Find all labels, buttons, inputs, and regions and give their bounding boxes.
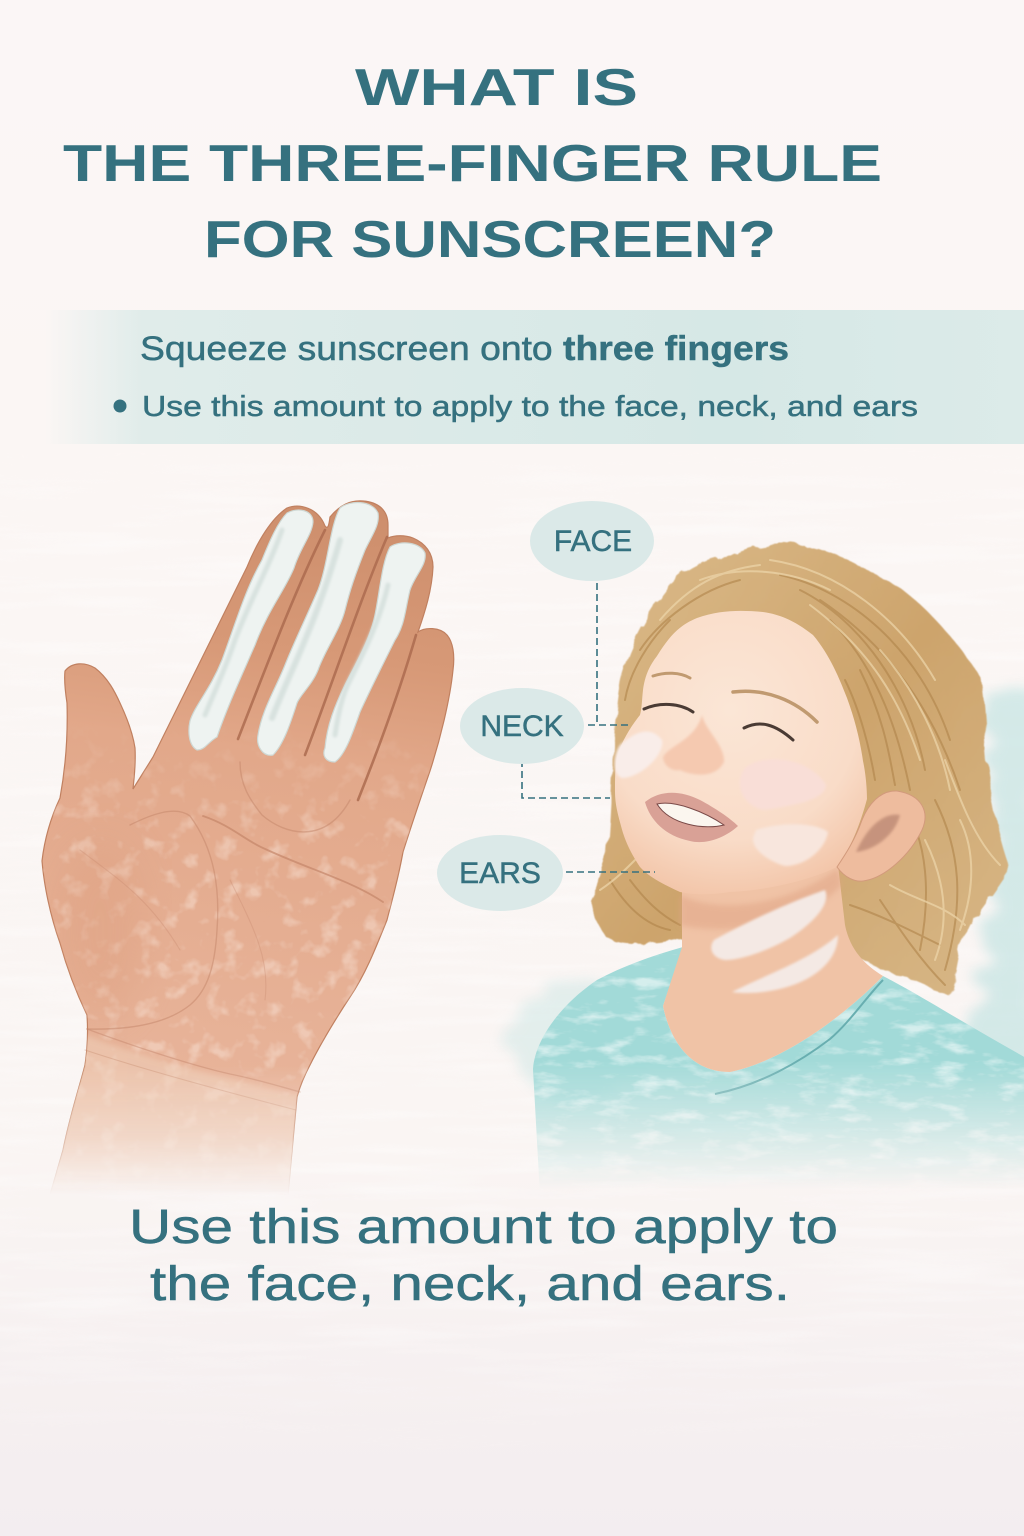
closing statement: the face, neck, and ears. bbox=[150, 1258, 790, 1311]
background paper streaks bbox=[0, 445, 1024, 1460]
sunscreen: left cheek bbox=[615, 732, 662, 778]
illustration: hand with sunscreen bbox=[40, 501, 460, 1200]
neck bbox=[663, 865, 883, 1072]
closing statement: Use this amount to apply to bbox=[129, 1201, 838, 1254]
sunscreen strip: ring finger bbox=[324, 543, 425, 762]
illustration: teal watercolor wash bbox=[510, 690, 1024, 1100]
lips bbox=[645, 793, 738, 842]
eyebrows bbox=[653, 673, 817, 722]
ear bbox=[837, 791, 925, 881]
sunscreen strip: middle finger bbox=[258, 503, 378, 755]
skin mottling bbox=[43, 760, 424, 1179]
connector lines bbox=[522, 572, 655, 872]
closing statement bbox=[129, 1201, 838, 1311]
face bbox=[615, 611, 867, 894]
label: EARS bbox=[437, 835, 563, 911]
hand shape bbox=[42, 501, 454, 1195]
finger gaps bbox=[238, 530, 416, 800]
shirt mottling bbox=[534, 954, 1024, 1164]
hair back bbox=[590, 543, 1010, 997]
shirt bbox=[533, 947, 1024, 1178]
eyes bbox=[644, 704, 793, 740]
label: EARS: EARS bbox=[459, 857, 541, 890]
sunscreen: neck lower bbox=[732, 935, 838, 993]
thumb pad shading bbox=[55, 840, 145, 1020]
label: FACE bbox=[530, 501, 654, 581]
wrist wash bbox=[58, 1034, 298, 1168]
label: NECK: NECK bbox=[480, 710, 564, 743]
instruction bullet text: Use this amount to apply to the face, neck, and ears bbox=[142, 391, 918, 423]
illustration: child applying sunscreen bbox=[520, 543, 1024, 1200]
sunscreen strip: index finger bbox=[189, 510, 313, 750]
title: WHAT IS bbox=[355, 59, 638, 117]
shirt collar hem bbox=[715, 980, 883, 1094]
sunscreen: right cheek bbox=[740, 759, 826, 810]
palm creases bbox=[80, 762, 383, 1110]
title: FOR SUNSCREEN? bbox=[204, 211, 776, 269]
panel: instruction band bbox=[45, 310, 1024, 444]
hair strands bbox=[600, 560, 1000, 985]
neck shadow bbox=[680, 868, 842, 929]
sunscreen: jaw bbox=[753, 824, 828, 866]
instruction heading: Squeeze sunscreen onto three fingers bbox=[140, 330, 789, 368]
label: FACE: FACE bbox=[554, 525, 632, 558]
teeth bbox=[657, 803, 724, 827]
bullet dot bbox=[114, 400, 126, 412]
title bbox=[63, 59, 882, 269]
nose bbox=[663, 715, 724, 775]
sunscreen: neck upper bbox=[711, 890, 826, 960]
label: NECK bbox=[460, 688, 584, 764]
title: THE THREE-FINGER RULE bbox=[63, 135, 882, 193]
